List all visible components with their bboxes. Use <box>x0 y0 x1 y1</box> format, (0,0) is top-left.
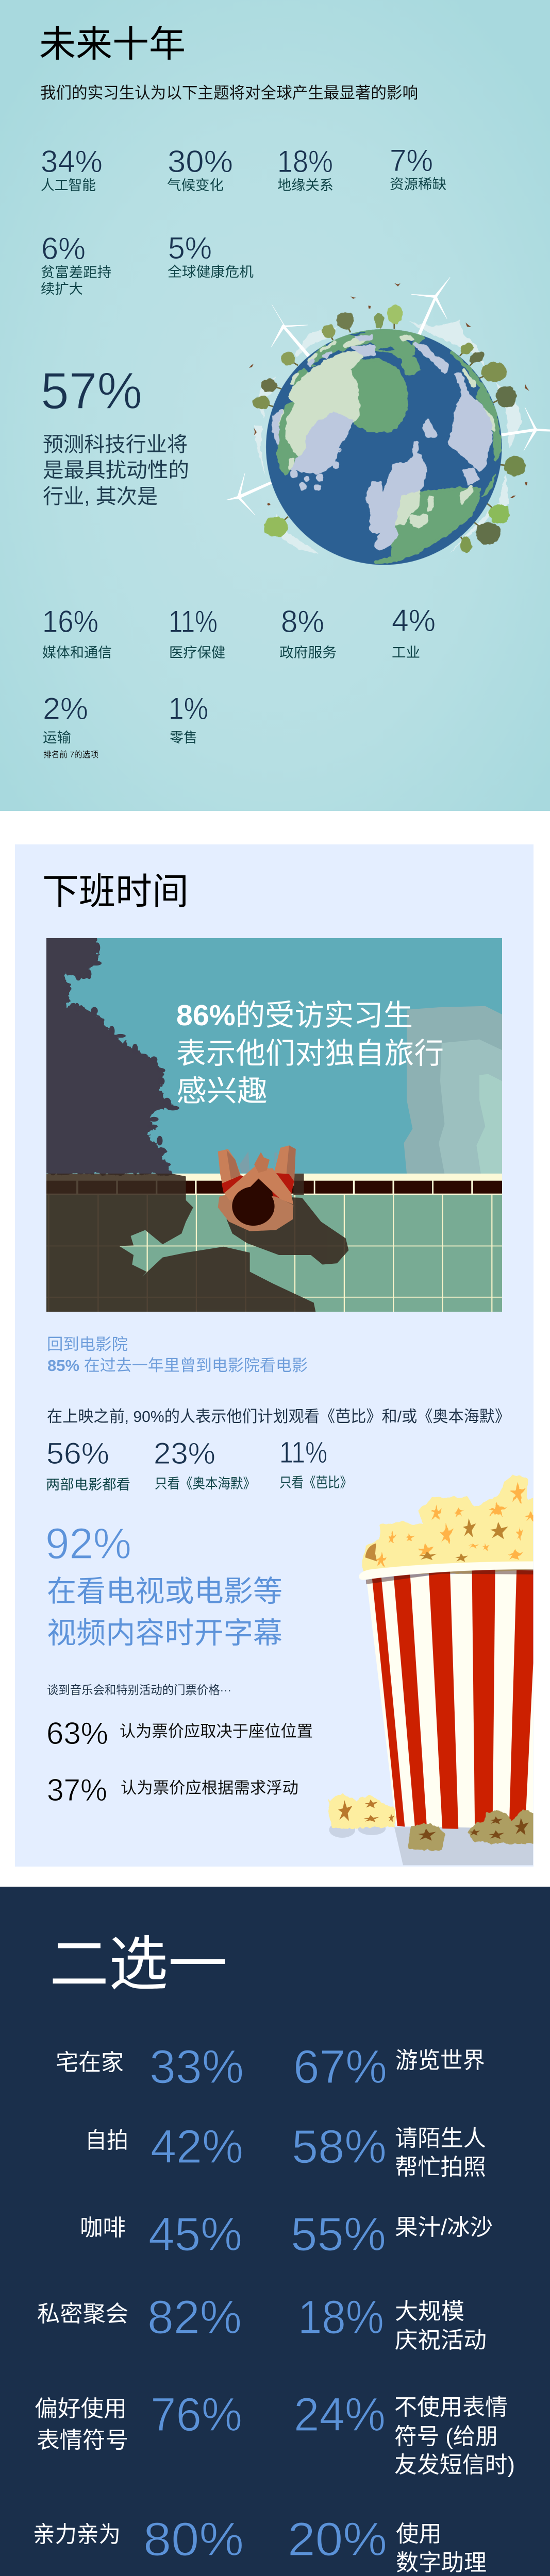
text: back to cinema <box>47 1335 308 1375</box>
row: do it yourself vs digital assistant: 亲力亲为 <box>33 2522 121 2547</box>
panel: next decade <box>0 0 550 811</box>
illustration: globe with trees and wind turbines <box>226 277 550 565</box>
row: do it yourself vs digital assistant <box>33 2513 487 2575</box>
row: selfie vs stranger: 自拍 <box>85 2128 128 2153</box>
stat: media <box>42 604 112 660</box>
stat: global health: 全球健康危机 <box>168 264 254 280</box>
big stat: 57%: 57% <box>41 362 142 420</box>
footnote: 排名前 7的选项 <box>43 750 98 759</box>
row: coffee vs juice: 咖啡 <box>80 2215 126 2241</box>
stat: government: 8% <box>281 604 324 639</box>
stat: healthcare: 医疗保健 <box>169 645 225 660</box>
stat: Oppenheimer only: 23% <box>154 1437 215 1470</box>
stat: Oppenheimer only: 只看《奥本海默》 <box>155 1476 256 1492</box>
stat: government: 政府服务 <box>279 645 337 660</box>
row: emoji vs no emoji: 符号 (给朋 <box>394 2424 498 2449</box>
big stat: subtitles: 视频内容时开字幕 <box>47 1617 282 1650</box>
row: emoji vs no emoji: 友发短信时) <box>394 2452 515 2478</box>
text: back to cinema: 回到电影院 <box>47 1335 128 1353</box>
tree and person shadows on deck <box>41 1174 348 1317</box>
stat: seat pricing <box>46 1716 313 1751</box>
row: selfie vs stranger: 帮忙拍照 <box>395 2155 486 2180</box>
row: emoji vs no emoji <box>35 2388 515 2478</box>
stat: wealth gap: 续扩大 <box>41 281 83 297</box>
text: Barbie and Oppenheimer intro: 在上映之前, 90%的人表示他们计划观看《芭比》和/或《奥本海默》 <box>47 1408 510 1426</box>
row: selfie vs stranger: 42% <box>151 2121 243 2173</box>
row: stay home vs travel: 游览世界 <box>395 2048 485 2073</box>
big stat: 57%: 预测科技行业将 <box>43 433 188 456</box>
heading: next decade: 未来十年 <box>39 24 186 65</box>
row: coffee vs juice: 55% <box>291 2208 386 2261</box>
row: do it yourself vs digital assistant: 80% <box>143 2513 244 2566</box>
row: emoji vs no emoji: 76% <box>151 2388 242 2441</box>
stat: geopolitics <box>277 144 334 193</box>
stat: resources: 资源稀缺 <box>390 177 446 192</box>
row: do it yourself vs digital assistant: 使用 <box>396 2521 442 2547</box>
stat: wealth gap <box>41 231 111 297</box>
row: coffee vs juice: 45% <box>148 2208 242 2261</box>
big stat: subtitles: 在看电视或电影等 <box>47 1575 282 1608</box>
row: selfie vs stranger <box>85 2121 486 2180</box>
stat: climate: 30% <box>168 144 233 179</box>
stat: global health: 5% <box>168 231 212 265</box>
row: stay home vs travel: 67% <box>293 2041 387 2093</box>
stat: global health <box>168 231 254 280</box>
stat: media: 16% <box>42 604 98 639</box>
row: small gathering vs big party <box>37 2291 487 2353</box>
stat: wealth gap: 6% <box>41 231 86 266</box>
row: small gathering vs big party: 大规模 <box>395 2299 464 2324</box>
headline on image: 感兴趣 <box>176 1075 268 1108</box>
panel: either or <box>0 1887 550 2576</box>
stat: Oppenheimer only <box>154 1437 256 1492</box>
heading: either or: 二选一 <box>49 1931 227 1997</box>
globe <box>266 329 502 565</box>
heading: after work: 下班时间 <box>42 872 189 912</box>
stat: healthcare: 11% <box>169 604 218 639</box>
row: do it yourself vs digital assistant: 数字助理 <box>396 2550 487 2575</box>
row: emoji vs no emoji: 偏好使用 <box>35 2396 127 2421</box>
stat: media: 媒体和通信 <box>42 645 112 660</box>
row: small gathering vs big party: 私密聚会 <box>37 2301 128 2327</box>
row: stay home vs travel: 宅在家 <box>56 2050 124 2075</box>
row: coffee vs juice: 果汁/冰沙 <box>395 2215 493 2240</box>
stat: industry: 4% <box>392 603 436 638</box>
text: ticket price intro: 谈到音乐会和特别活动的门票价格··· <box>47 1683 231 1697</box>
headline on image <box>176 999 444 1108</box>
stat: government <box>279 604 337 660</box>
big stat: 57%: 是最具扰动性的 <box>43 459 189 482</box>
stat: geopolitics: 18% <box>277 144 333 179</box>
stat: demand pricing: 37% <box>47 1773 107 1807</box>
big stat: subtitles <box>45 1519 282 1650</box>
birds <box>249 283 529 505</box>
stat: demand pricing: 认为票价应根据需求浮动 <box>121 1779 298 1797</box>
stat: both films <box>46 1437 130 1493</box>
headline on image: 86%的受访实习生 <box>176 999 413 1032</box>
stat: healthcare <box>169 604 225 660</box>
stat: retail <box>169 691 208 745</box>
row: selfie vs stranger: 请陌生人 <box>395 2126 486 2151</box>
illustration: poolside swimmer <box>35 929 505 1317</box>
row: selfie vs stranger: 58% <box>292 2121 387 2173</box>
stat: AI: 人工智能 <box>41 178 96 193</box>
big stat: 57%: 行业, 其次是 <box>43 485 158 508</box>
stat: climate: 气候变化 <box>167 178 224 193</box>
stat: Barbie only <box>279 1436 352 1490</box>
stat: both films: 两部电影都看 <box>46 1477 130 1493</box>
stat: AI: 34% <box>41 144 103 179</box>
stat: resources <box>390 143 446 192</box>
row: do it yourself vs digital assistant: 20% <box>288 2513 387 2566</box>
big stat: subtitles: 92% <box>45 1519 131 1568</box>
stat: industry <box>392 603 436 660</box>
tree shadow on water <box>46 938 179 1176</box>
row: coffee vs juice <box>80 2208 493 2261</box>
panel: after work <box>15 844 539 1867</box>
row: stay home vs travel: 33% <box>149 2041 244 2093</box>
stat: demand pricing <box>47 1773 298 1807</box>
stat: resources: 7% <box>390 143 433 178</box>
headline on image: 表示他们对独自旅行 <box>176 1037 444 1070</box>
stat: seat pricing: 63% <box>46 1716 108 1751</box>
stat: transport: 2% <box>43 691 88 726</box>
stat: both films: 56% <box>46 1437 109 1470</box>
stat: Barbie only: 只看《芭比》 <box>279 1475 352 1490</box>
stat: transport <box>43 691 88 745</box>
big stat: 57% <box>41 362 189 508</box>
stat: wealth gap: 贫富差距持 <box>41 265 111 280</box>
row: small gathering vs big party: 18% <box>298 2291 384 2344</box>
stat: geopolitics: 地缘关系 <box>277 178 334 193</box>
stat: Barbie only: 11% <box>279 1436 327 1469</box>
person <box>218 1145 296 1231</box>
row: emoji vs no emoji: 不使用表情 <box>394 2395 508 2420</box>
stat: industry: 工业 <box>392 645 420 660</box>
row: emoji vs no emoji: 表情符号 <box>37 2428 128 2453</box>
row: small gathering vs big party: 庆祝活动 <box>395 2328 487 2353</box>
row: small gathering vs big party: 82% <box>147 2291 242 2344</box>
stat: climate <box>167 144 233 193</box>
text: back to cinema: 85% 在过去一年里曾到电影院看电影 <box>47 1357 308 1375</box>
row: stay home vs travel <box>56 2041 485 2093</box>
wind turbines <box>226 277 550 515</box>
stat: retail: 零售 <box>170 730 197 745</box>
intro text: 我们的实习生认为以下主题将对全球产生最显著的影响 <box>40 84 418 102</box>
stat: seat pricing: 认为票价应取决于座位位置 <box>120 1722 313 1740</box>
stat: transport: 运输 <box>43 730 71 745</box>
row: emoji vs no emoji: 24% <box>294 2388 386 2441</box>
stat: retail: 1% <box>169 691 208 726</box>
illustration: popcorn bucket <box>329 1476 539 1865</box>
trees <box>253 304 526 553</box>
